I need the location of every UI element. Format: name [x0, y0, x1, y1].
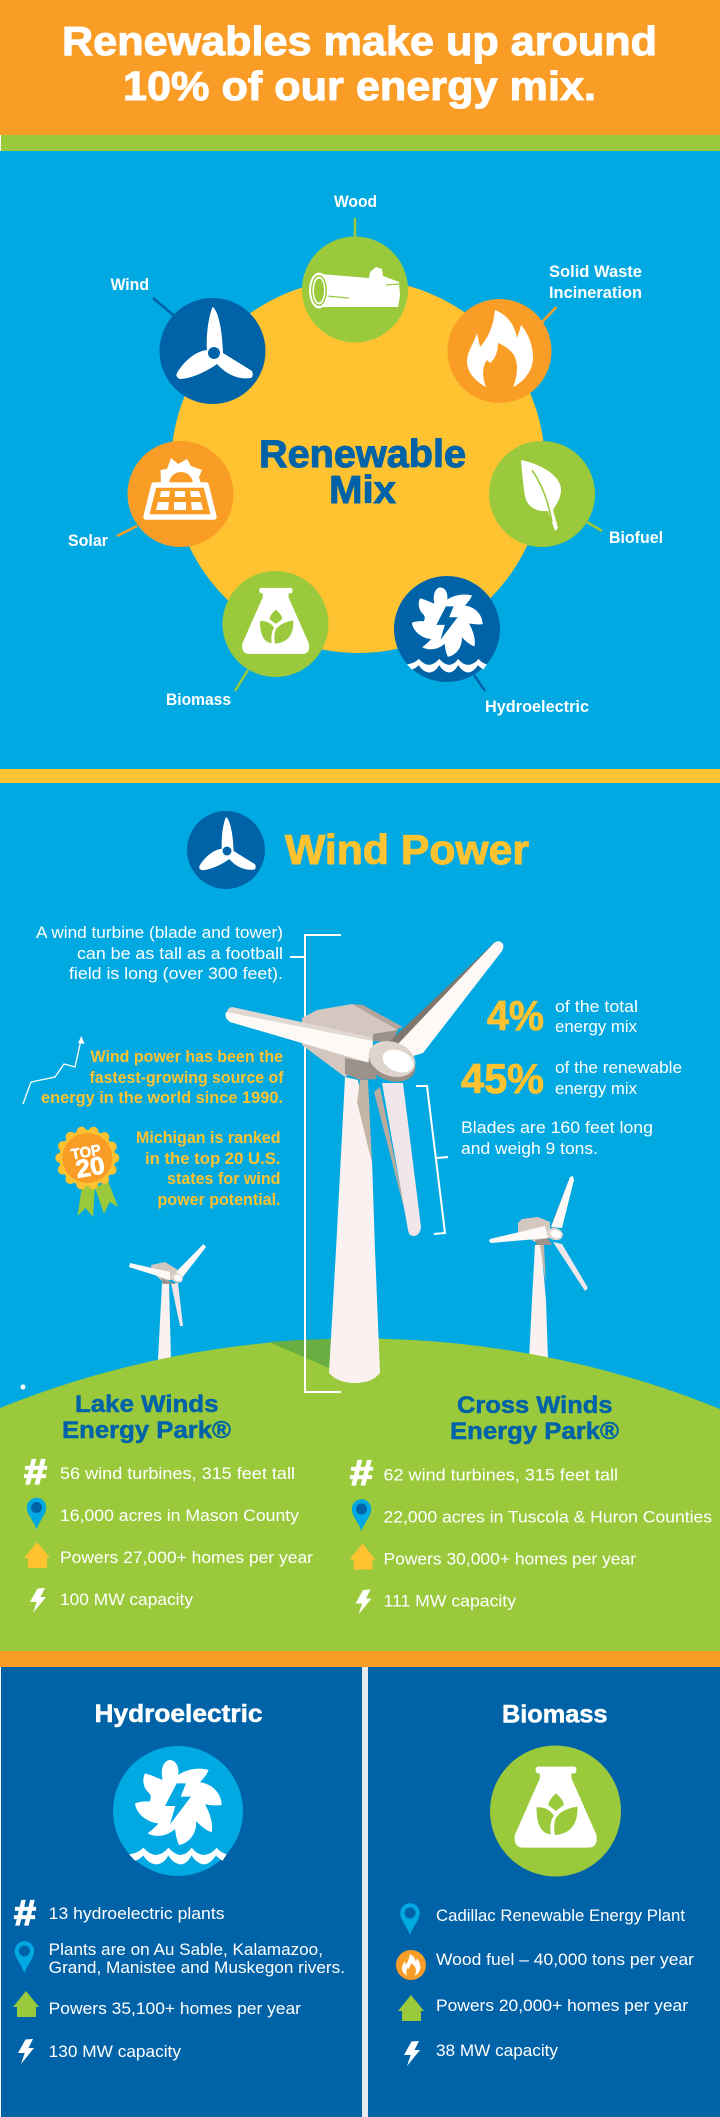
icon: map pin	[352, 1499, 371, 1531]
park: cross winds	[350, 1392, 712, 1614]
text: rivers: Plants are on Au Sable, Kalamazoo,	[49, 1940, 323, 1959]
text: blade size: Blades are 160 feet long	[461, 1118, 653, 1137]
park: lake winds: 56 wind turbines, 315 feet tall	[60, 1464, 295, 1483]
icon: hash: #	[350, 1454, 373, 1493]
heading: renewable mix: Mix	[329, 469, 396, 512]
icon: house	[350, 1544, 376, 1570]
park: cross winds: 62 wind turbines, 315 feet tall	[384, 1466, 618, 1484]
central sun circle	[171, 279, 545, 653]
icon: house	[24, 1542, 50, 1568]
text: fastest growing: Wind power has been the	[90, 1047, 283, 1066]
text: fastest growing	[41, 1047, 284, 1107]
item: solid waste incineration: Solid Waste	[549, 262, 642, 281]
item: wind: Wind	[110, 275, 149, 294]
panel: biomass: Biomass	[502, 1700, 608, 1728]
stat: 45 percent: of the renewable	[555, 1058, 682, 1077]
panel: renewable mix	[0, 151, 720, 769]
icon: map pin	[27, 1498, 46, 1530]
item: biomass: Biomass	[166, 690, 231, 709]
text: turbine height: can be as tall as a football	[77, 944, 283, 963]
item: biofuel: Biofuel	[609, 528, 663, 547]
icon: top 20 badge: 20	[74, 1151, 107, 1184]
panel: green hill with energy parks	[0, 935, 720, 1651]
panel: header banner	[0, 0, 720, 135]
icon: map pin	[15, 1941, 34, 1973]
park: lake winds: 16,000 acres in Mason County	[60, 1506, 300, 1525]
panel: hydroelectric: 130 MW capacity	[49, 2042, 181, 2061]
icon: bolt	[404, 2041, 420, 2066]
park: cross winds: 22,000 acres in Tuscola & Huron Counties	[384, 1508, 712, 1526]
panel: hydroelectric: Powers 35,100+ homes per year	[49, 1999, 301, 2018]
small turbine: left	[129, 1244, 206, 1360]
stat: 45 percent	[461, 1055, 682, 1102]
park: lake winds: Lake Winds	[75, 1391, 218, 1418]
item: solid waste incineration	[448, 262, 642, 403]
text: michigan ranking: power potential.	[158, 1190, 280, 1209]
panel: hydroelectric: Hydroelectric	[94, 1700, 263, 1728]
text: michigan ranking	[136, 1128, 280, 1209]
height bracket	[290, 935, 341, 1392]
title: Renewables make up around	[62, 18, 657, 64]
park: lake winds: 100 MW capacity	[60, 1590, 193, 1609]
icon: house	[398, 1995, 424, 2021]
text: michigan ranking: in the top 20 U.S.	[145, 1149, 280, 1168]
icon: bolt	[356, 1590, 372, 1614]
heading: wind power: Wind Power	[285, 826, 529, 873]
blade bracket	[416, 1086, 448, 1234]
text: michigan ranking: Michigan is ranked	[136, 1128, 280, 1147]
panel: biomass: Powers 20,000+ homes per year	[436, 1996, 688, 2015]
panel: biomass: Wood fuel – 40,000 tons per year	[436, 1950, 694, 1969]
text: blade size	[461, 1118, 653, 1158]
stat: 4 percent: 4%	[487, 992, 544, 1039]
item: solar: Solar	[68, 531, 108, 550]
small turbine: right	[489, 1176, 588, 1360]
icon: bolt	[30, 1588, 46, 1613]
text: turbine height: field is long (over 300 feet).	[69, 964, 283, 983]
stat: 4 percent	[487, 992, 638, 1039]
panel: wind power	[0, 783, 720, 1423]
park: cross winds: Powers 30,000+ homes per year	[384, 1550, 636, 1568]
heading: wind power	[187, 811, 529, 889]
item: biofuel	[489, 441, 663, 547]
text: blade size: and weigh 9 tons.	[461, 1139, 598, 1158]
icon: bolt	[18, 2039, 34, 2064]
text: turbine height	[36, 923, 283, 983]
title	[62, 18, 657, 109]
panel: biomass	[368, 1667, 720, 2117]
text: fastest growing: fastest-growing source of	[90, 1068, 284, 1087]
text: rivers: Grand, Manistee and Muskegon rivers.	[49, 1958, 345, 1977]
icon: hydro wheel	[113, 1746, 243, 1876]
main wind turbine	[226, 941, 503, 1383]
item: hydroelectric	[394, 576, 589, 716]
park: lake winds: Energy Park®	[62, 1417, 231, 1444]
heading: renewable mix	[259, 433, 466, 512]
stat: 4 percent: of the total	[555, 997, 638, 1016]
icon: flame	[396, 1950, 426, 1980]
text: michigan ranking: states for wind	[167, 1169, 280, 1188]
icon: top 20 badge: TOP	[70, 1142, 102, 1164]
item: wood: Wood	[334, 192, 377, 211]
icon: hash: #	[14, 1894, 36, 1933]
stat: 45 percent: energy mix	[555, 1079, 637, 1098]
park: cross winds: 111 MW capacity	[384, 1592, 517, 1610]
park: lake winds	[24, 1391, 313, 1613]
item: wood	[302, 192, 408, 342]
panel: biomass: Cadillac Renewable Energy Plant	[436, 1906, 685, 1925]
text: fastest growing: energy in the world since 1990.	[41, 1088, 283, 1107]
stat: 4 percent: energy mix	[555, 1017, 637, 1036]
panel: hydroelectric: 13 hydroelectric plants	[49, 1904, 224, 1923]
park: lake winds: Powers 27,000+ homes per year	[60, 1548, 313, 1567]
icon: house	[13, 1991, 39, 2017]
icon: growth arrow	[23, 1036, 84, 1104]
panel: hydroelectric	[0, 1667, 362, 2117]
park: cross winds: Cross Winds	[457, 1392, 612, 1419]
icon: flask	[490, 1746, 621, 1876]
icon: hash: #	[24, 1453, 47, 1492]
title: 10% of our energy mix.	[123, 63, 596, 109]
item: wind	[110, 275, 266, 404]
item: solid waste incineration: Incineration	[549, 283, 642, 302]
text: turbine height: A wind turbine (blade and tower)	[36, 923, 283, 942]
text: rivers	[49, 1940, 345, 1977]
item: hydroelectric: Hydroelectric	[485, 697, 589, 716]
heading: renewable mix: Renewable	[259, 433, 466, 476]
icon: top 20 badge	[59, 1130, 118, 1217]
item: solar	[68, 441, 234, 550]
panel: biomass: 38 MW capacity	[436, 2041, 558, 2060]
park: cross winds: Energy Park®	[450, 1418, 619, 1445]
stat: 45 percent: 45%	[461, 1055, 544, 1102]
icon: map pin	[400, 1903, 420, 1935]
item: biomass	[166, 571, 328, 709]
